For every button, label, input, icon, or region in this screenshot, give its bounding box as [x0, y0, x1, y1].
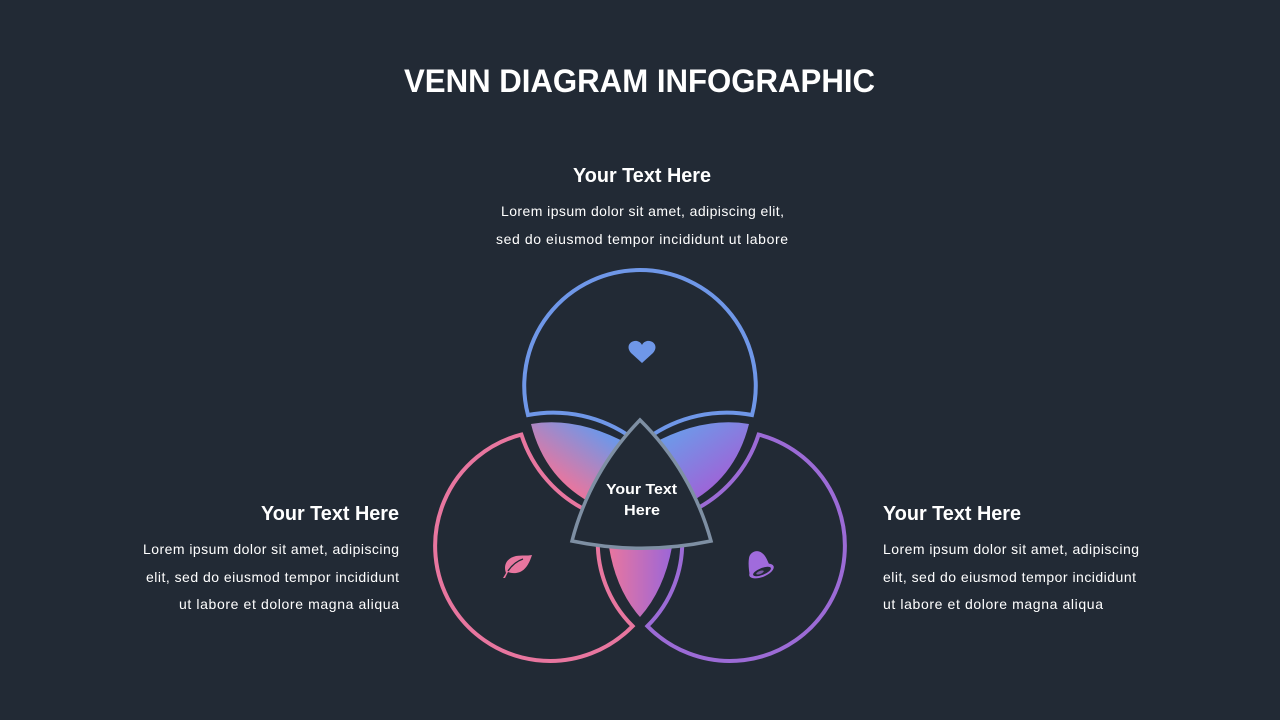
text block: top: Your Text Here — [573, 165, 711, 187]
venn diagram — [435, 270, 845, 661]
overlap petal: bottom — [609, 535, 672, 617]
circle: top blue — [524, 270, 756, 438]
circle: right purple — [647, 435, 845, 661]
text block: right: ut labore et dolore magna aliqua — [883, 596, 1103, 612]
center label: Here — [624, 502, 660, 519]
center triangle — [572, 420, 711, 548]
text block: right: elit, sed do eiusmod tempor incididunt — [883, 569, 1136, 585]
icon: heart — [629, 341, 655, 363]
icon: leaf — [503, 555, 532, 578]
icon: bell — [747, 551, 776, 581]
text block: left: Your Text Here — [261, 503, 399, 525]
text block: top — [496, 165, 788, 247]
text block: left: ut labore et dolore magna aliqua — [179, 596, 399, 612]
text block: right: Your Text Here — [883, 503, 1021, 525]
center label: Your Text — [606, 481, 677, 498]
text block: top: sed do eiusmod tempor incididunt ut labore — [496, 231, 788, 247]
text block: left — [143, 503, 399, 612]
center label — [606, 481, 677, 519]
overlap petal: top and left — [531, 422, 630, 505]
text block: right — [883, 503, 1139, 612]
title: VENN DIAGRAM INFOGRAPHIC — [404, 63, 875, 99]
text block: left: Lorem ipsum dolor sit amet, adipiscing — [143, 541, 399, 557]
overlap petal: top and right — [650, 422, 749, 505]
text block: left: elit, sed do eiusmod tempor incididunt — [146, 569, 399, 585]
text block: top: Lorem ipsum dolor sit amet, adipiscing elit, — [501, 203, 784, 219]
circle: left pink — [435, 435, 633, 661]
text block: right: Lorem ipsum dolor sit amet, adipiscing — [883, 541, 1139, 557]
